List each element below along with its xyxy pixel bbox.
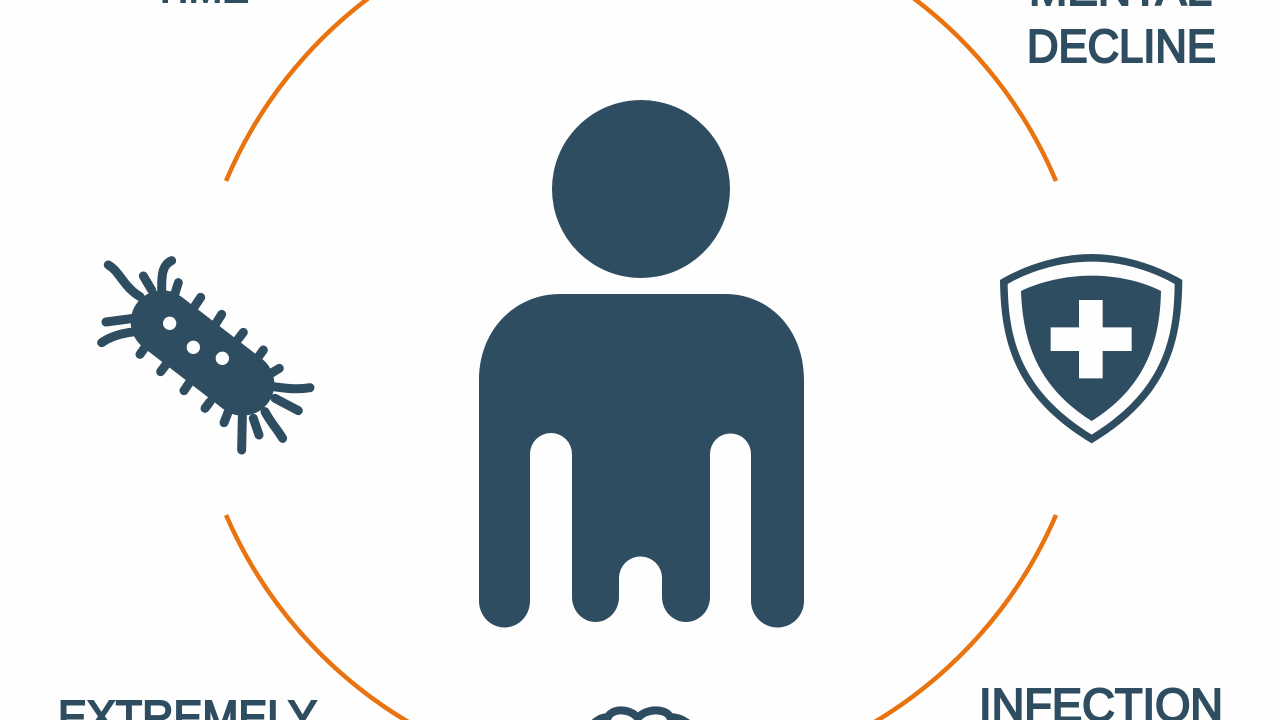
bacterium body: [162, 322, 243, 384]
label: mental decline: [1027, 0, 1216, 72]
shield outer: [1000, 254, 1182, 443]
figure head: [552, 100, 730, 278]
bacterium spots: [163, 317, 229, 365]
icon: shield with cross: [1000, 254, 1182, 443]
label: mental decline: DECLINE: [1027, 20, 1216, 72]
medical cross: [1051, 300, 1132, 378]
figure body: [479, 294, 804, 628]
shield core: [1021, 276, 1161, 421]
icon: brain outline: [592, 710, 690, 720]
shield inner gap: [1008, 262, 1175, 435]
bacterium hairs: [102, 261, 310, 450]
orange ring arcs: [226, 0, 1056, 720]
icon: bacterium: [102, 261, 310, 450]
icon: human figure: [479, 100, 804, 628]
